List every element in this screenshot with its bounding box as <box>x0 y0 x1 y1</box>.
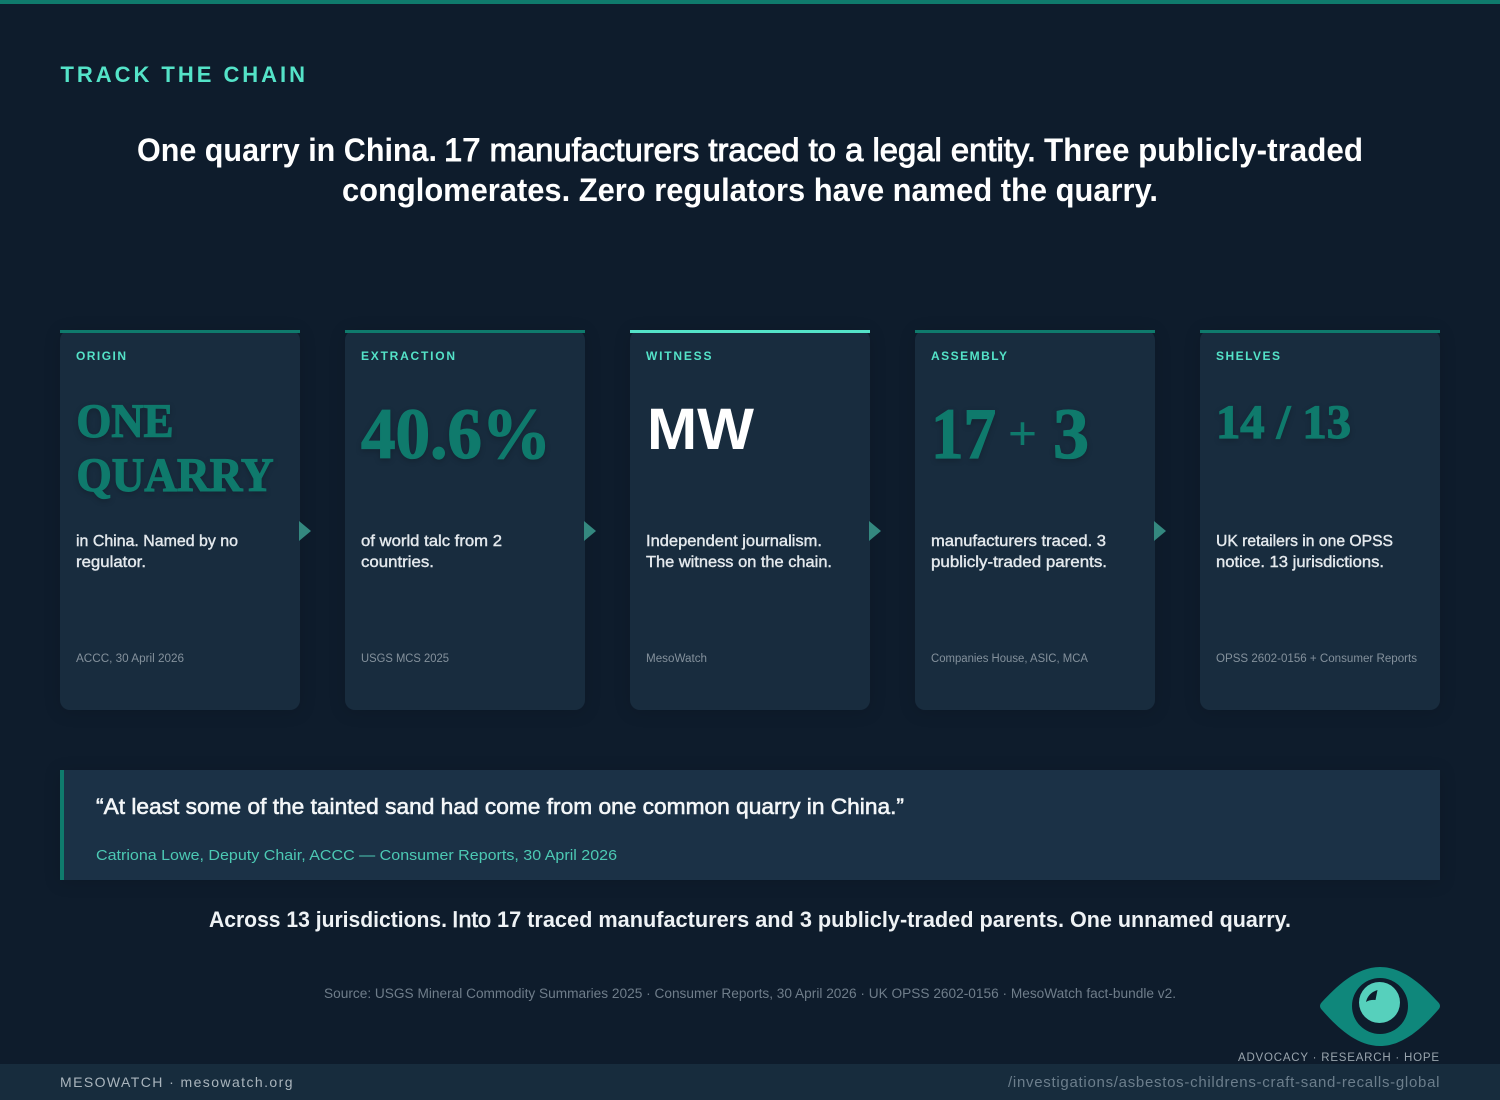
arrow: extraction to witness <box>584 521 596 541</box>
quote panel <box>60 770 1440 880</box>
stat: 17 + 3 <box>931 394 1089 474</box>
stat: 17 + 3: 3 <box>1053 394 1089 474</box>
description: origin: in China. Named by no <box>76 533 238 550</box>
panel: assembly <box>915 330 1155 710</box>
stat: 17 + 3: + <box>1008 407 1037 459</box>
source: shelves: OPSS 2602-0156 + Consumer Reports <box>1216 653 1417 665</box>
stat: one quarry: ONE <box>76 395 174 448</box>
logo tagline: ADVOCACY · RESEARCH · HOPE <box>1238 1052 1439 1064</box>
panel: shelves <box>1200 330 1440 710</box>
stat: 14 / 13: 14 / 13 <box>1216 396 1351 449</box>
summary line: 17 traced manufacturers and 3 publicly-traded parents. <box>497 907 1064 932</box>
description: witness: Independent journalism. <box>646 533 822 550</box>
description: assembly <box>931 533 1107 571</box>
arrow: witness to assembly <box>869 521 881 541</box>
summary line: Across 13 jurisdictions. <box>209 907 447 932</box>
description: assembly: manufacturers traced. 3 <box>931 533 1106 550</box>
source line: Source: USGS Mineral Commodity Summaries 2025 · Consumer Reports, 30 April 2026 · UK OPSS 2602-0156 · MesoWatch fact-bundle v2. <box>324 986 1176 1001</box>
panel: witness <box>630 330 870 710</box>
description: shelves: notice. 13 jurisdictions. <box>1216 554 1384 571</box>
panel: extraction <box>345 330 585 710</box>
label: witness: WITNESS <box>646 349 712 363</box>
footer path: /investigations/asbestos-childrens-craft-sand-recalls-global <box>1008 1074 1440 1091</box>
description: origin: regulator. <box>76 554 146 571</box>
eyebrow: track the chain: TRACK THE CHAIN <box>60 62 305 87</box>
arrow: origin to extraction <box>299 521 311 541</box>
summary line: One unnamed quarry. <box>1070 907 1291 932</box>
summary line <box>209 907 1291 932</box>
stat: 40.6%: 40.6% <box>361 394 551 474</box>
description: extraction: countries. <box>361 554 434 571</box>
headline <box>137 132 1363 208</box>
label: origin: ORIGIN <box>76 349 126 363</box>
source: origin: ACCC, 30 April 2026 <box>76 653 184 665</box>
stat: one quarry: QUARRY <box>76 449 274 502</box>
footer bar <box>0 1064 1500 1100</box>
label: shelves: SHELVES <box>1216 349 1280 363</box>
source: witness: MesoWatch <box>646 653 707 665</box>
arrow: assembly to shelves <box>1154 521 1166 541</box>
description: assembly: publicly-traded parents. <box>931 554 1107 571</box>
label: extraction: EXTRACTION <box>361 349 455 363</box>
footer brand: MESOWATCH · mesowatch.org <box>60 1074 292 1090</box>
headline: One quarry in China. <box>137 132 437 168</box>
headline: 17 manufacturers traced to a legal entity. <box>444 132 1036 168</box>
source: assembly: Companies House, ASIC, MCA <box>931 653 1088 665</box>
description: shelves: UK retailers in one OPSS <box>1216 533 1393 550</box>
quote text: “At least some of the tainted sand had come from one common quarry in China.” <box>96 794 904 819</box>
stat: 17 + 3: 17 <box>931 394 996 474</box>
label: assembly: ASSEMBLY <box>931 349 1007 363</box>
source: extraction: USGS MCS 2025 <box>361 653 449 665</box>
stat: one quarry <box>76 395 274 502</box>
description: witness: The witness on the chain. <box>646 554 832 571</box>
description: origin <box>76 533 238 571</box>
headline: Three publicly-traded <box>1044 132 1363 168</box>
description: shelves <box>1216 533 1393 571</box>
quote attribution: Catriona Lowe, Deputy Chair, ACCC — Consumer Reports, 30 April 2026 <box>96 847 617 864</box>
stat: MW: MW <box>647 397 754 462</box>
description: extraction <box>361 533 502 571</box>
panel: origin <box>60 330 300 710</box>
description: witness <box>646 533 832 571</box>
headline: conglomerates. Zero regulators have named the quarry. <box>342 172 1158 208</box>
description: extraction: of world talc from 2 <box>361 533 502 550</box>
icon: eye logo <box>1320 967 1440 1046</box>
summary line: Into <box>452 907 491 932</box>
